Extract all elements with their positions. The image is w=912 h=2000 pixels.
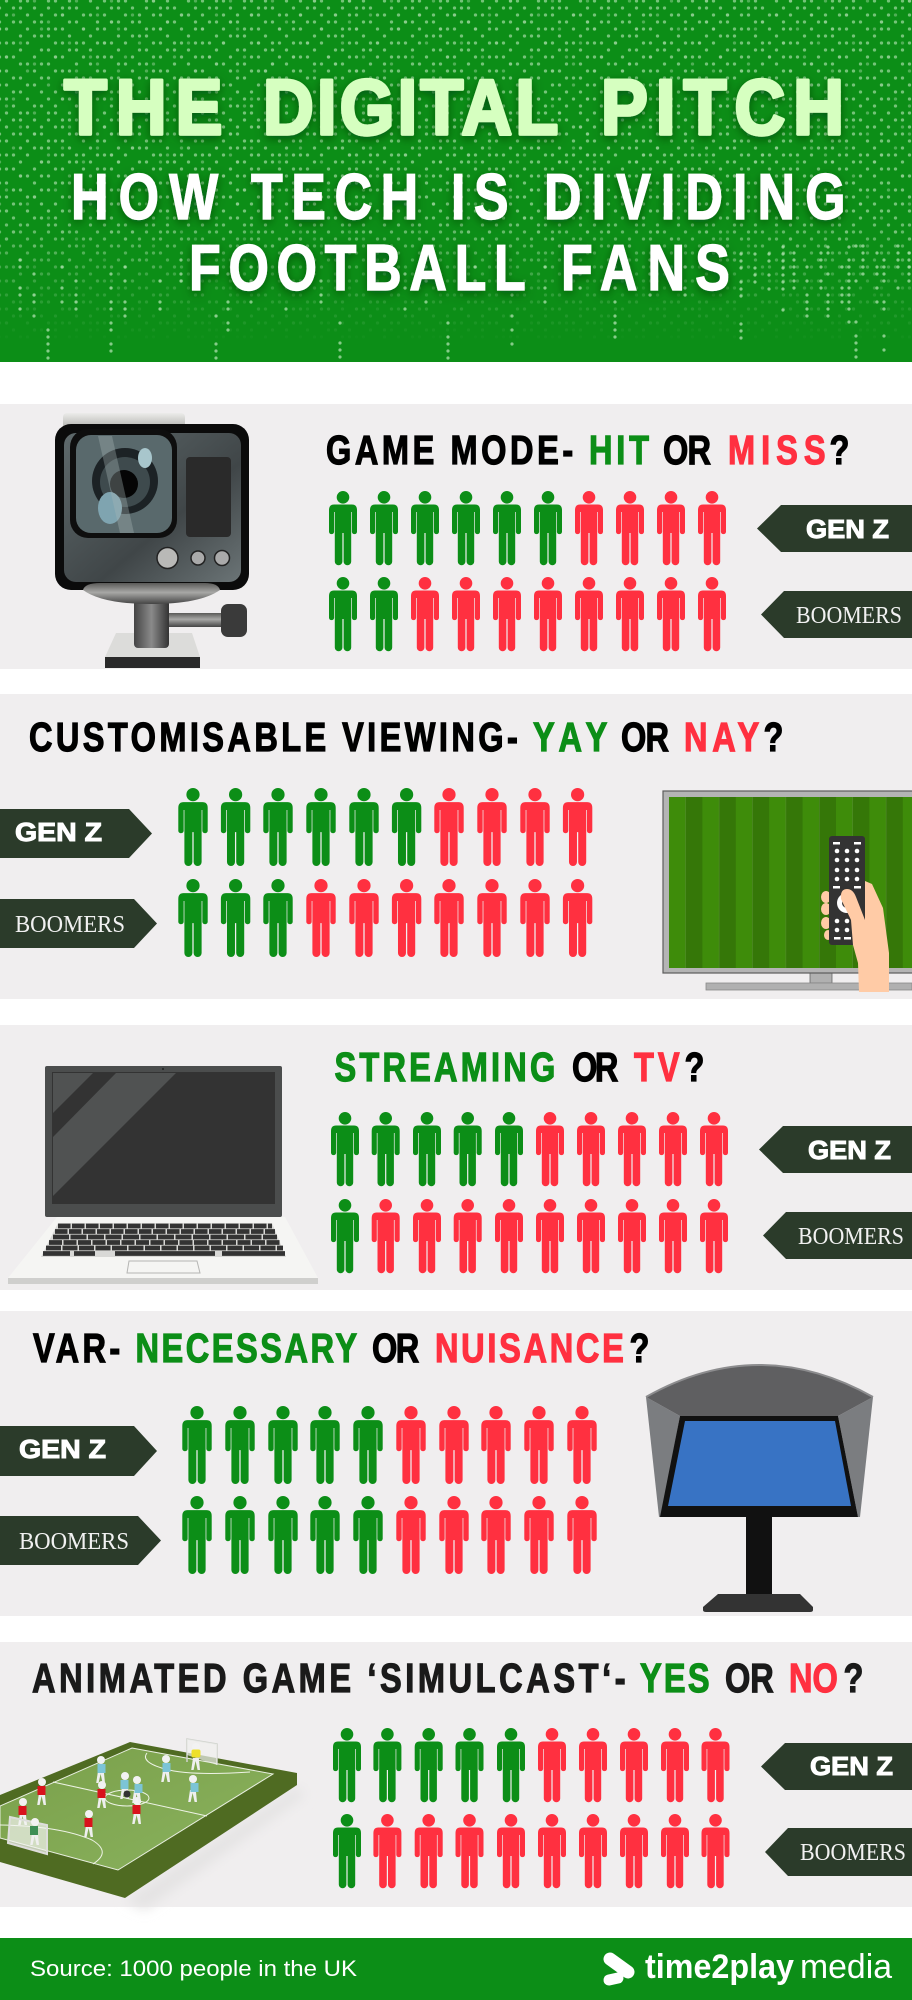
- icon: 3D pitch: [0, 1739, 305, 1910]
- tag: Gen Z: GEN Z: [19, 1434, 106, 1464]
- source note: Source: 1000 people in the UK: [30, 1956, 357, 1981]
- heading: VAR-: [33, 1326, 120, 1371]
- title: [64, 64, 844, 151]
- tag: Gen Z: GEN Z: [15, 817, 102, 847]
- heading: NECESSARY: [136, 1326, 357, 1371]
- heading: STREAMING: [334, 1045, 555, 1090]
- icon: laptop: [8, 1066, 318, 1284]
- heading: TV: [634, 1045, 680, 1090]
- tag: Boomers: [763, 1212, 912, 1259]
- title: PITCH: [601, 64, 844, 151]
- heading: [326, 428, 849, 473]
- heading: YAY: [533, 715, 607, 760]
- subtitle: HOW: [71, 162, 219, 233]
- heading: ?: [764, 715, 783, 760]
- pictogram row: Boomers: [333, 1814, 730, 1888]
- heading: GAME MODE-: [326, 428, 573, 473]
- heading: ?: [630, 1326, 649, 1371]
- tag: Boomers: BOOMERS: [798, 1224, 904, 1250]
- pictogram row: Boomers: [329, 577, 726, 651]
- tag: Gen Z: GEN Z: [808, 1135, 891, 1165]
- pictogram row: Gen Z: [182, 1406, 597, 1484]
- pictogram row: Boomers: [178, 879, 592, 957]
- subtitle: DIVIDING: [544, 162, 846, 233]
- heading: ANIMATED GAME ‘SIMULCAST‘-: [32, 1656, 626, 1701]
- logo: [609, 1948, 892, 1986]
- title: DIGITAL: [263, 64, 558, 151]
- tag: Gen Z: [0, 1426, 157, 1476]
- heading: NAY: [684, 715, 759, 760]
- heading: OR: [572, 1045, 618, 1090]
- tag: Gen Z: [0, 809, 152, 858]
- heading: MISS: [728, 428, 826, 473]
- title: THE: [64, 64, 222, 151]
- heading: [29, 715, 783, 760]
- heading: NUISANCE: [435, 1326, 624, 1371]
- heading: ?: [684, 1045, 704, 1090]
- tag: Gen Z: [757, 505, 912, 552]
- pictogram row: Gen Z: [331, 1112, 728, 1186]
- logo: media: [800, 1948, 892, 1986]
- pictogram row: Gen Z: [178, 788, 592, 866]
- tag: Boomers: [0, 1516, 161, 1565]
- tag: Gen Z: GEN Z: [806, 514, 889, 544]
- heading: OR: [663, 428, 711, 473]
- tag: Boomers: [761, 591, 912, 638]
- heading: [33, 1326, 649, 1371]
- tag: Boomers: BOOMERS: [19, 1529, 129, 1555]
- tag: Gen Z: GEN Z: [810, 1751, 893, 1781]
- subtitle: FANS: [561, 233, 730, 304]
- pictogram row: Gen Z: [329, 491, 726, 565]
- heading: [334, 1045, 704, 1090]
- subtitle: [71, 162, 846, 304]
- tag: Gen Z: [761, 1743, 912, 1790]
- heading: NO: [789, 1656, 838, 1701]
- panel: animated simulcast: [0, 1642, 912, 1910]
- tag: Boomers: BOOMERS: [15, 912, 125, 938]
- heading: YES: [640, 1656, 710, 1701]
- subtitle: FOOTBALL: [189, 233, 526, 304]
- tag: Boomers: BOOMERS: [796, 603, 902, 629]
- panel: customisable viewing: [0, 694, 912, 999]
- panel: game mode: [0, 404, 912, 669]
- heading: HIT: [589, 428, 649, 473]
- tag: Gen Z: [759, 1126, 912, 1173]
- subtitle: TECH: [251, 162, 418, 233]
- heading: OR: [725, 1656, 774, 1701]
- pictogram row: Boomers: [182, 1496, 597, 1574]
- icon: television with remote: [663, 791, 912, 992]
- tag: Boomers: [765, 1828, 912, 1876]
- heading: OR: [372, 1326, 419, 1371]
- heading: ?: [830, 428, 849, 473]
- heading: OR: [621, 715, 669, 760]
- panel: VAR: [0, 1311, 912, 1616]
- subtitle: IS: [451, 162, 509, 233]
- logo: time2play: [645, 1948, 794, 1986]
- tag: Boomers: [0, 899, 157, 948]
- heading: ?: [844, 1656, 863, 1701]
- heading: CUSTOMISABLE VIEWING-: [29, 715, 518, 760]
- header banner: [0, 0, 912, 362]
- panel: streaming or TV: [0, 1025, 912, 1290]
- pictogram row: Boomers: [331, 1199, 728, 1273]
- footer: [0, 1938, 912, 2000]
- pictogram row: Gen Z: [333, 1728, 730, 1802]
- icon: action camera: [55, 413, 249, 668]
- icon: VAR monitor: [646, 1365, 873, 1612]
